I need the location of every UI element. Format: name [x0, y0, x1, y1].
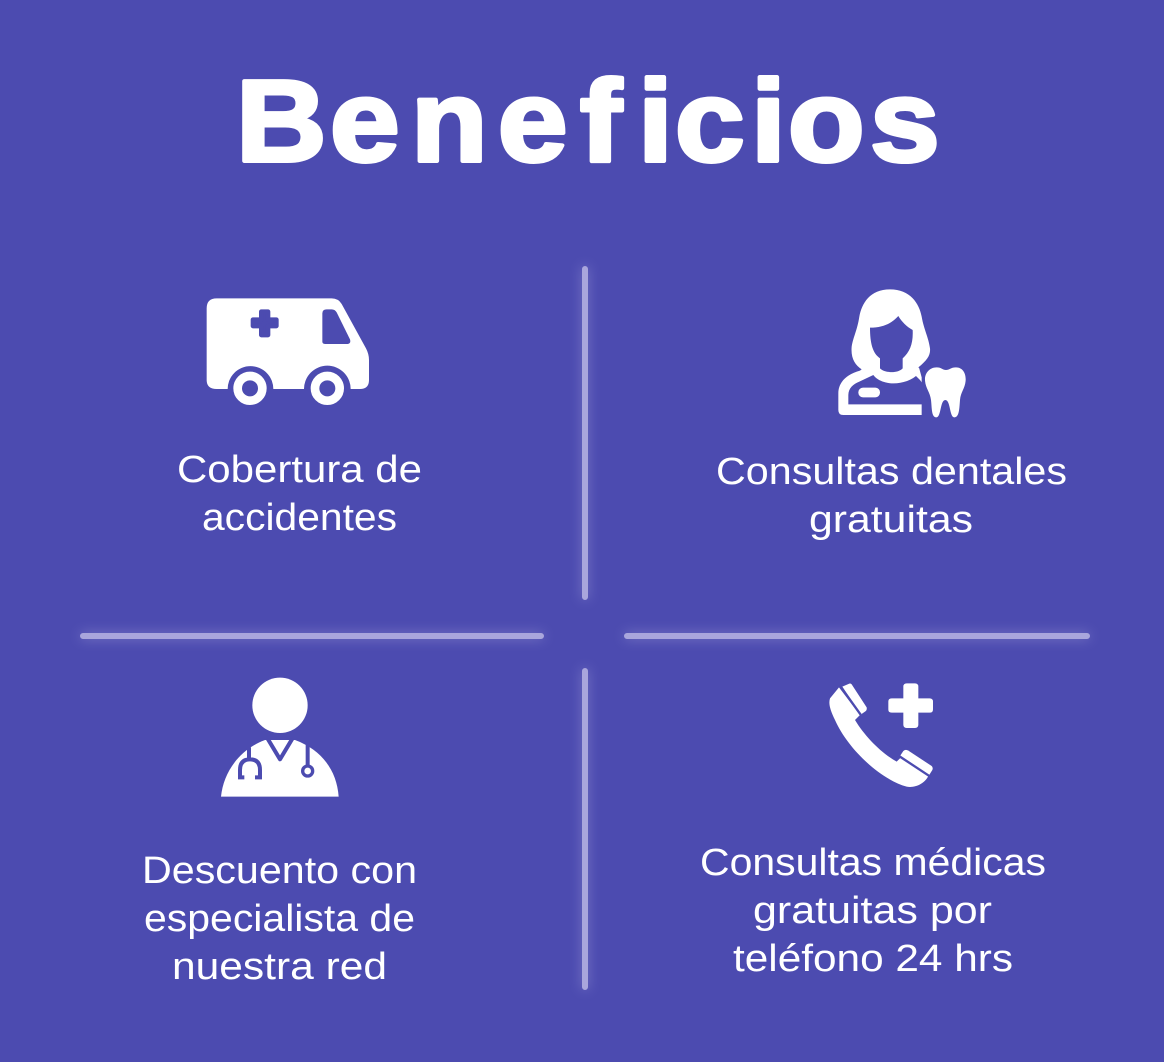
- text: specialist discount: Descuento con: [142, 850, 417, 892]
- text: specialist discount: nuestra red: [172, 946, 387, 988]
- text: phone medical consultations: Consultas médicas: [700, 842, 1046, 884]
- icon: doctor with stethoscope: [221, 678, 339, 797]
- text: dental consultations: gratuitas: [809, 499, 973, 541]
- text: specialist discount: especialista de: [144, 898, 415, 940]
- text: dental consultations: Consultas dentales: [716, 451, 1067, 493]
- icon: ambulance: [207, 298, 369, 401]
- text: phone medical consultations: [700, 842, 1046, 980]
- icon: phone with medical cross: [829, 683, 933, 787]
- panel: dental consultations: [716, 289, 1067, 541]
- text: accident coverage: [177, 449, 422, 539]
- panel: accident coverage: [177, 298, 422, 539]
- title: Beneficios: [236, 56, 940, 186]
- text: phone medical consultations: teléfono 24 hrs: [733, 938, 1013, 980]
- icon: dentist with tooth: [838, 289, 966, 420]
- panel: phone medical consultations: [700, 683, 1046, 980]
- text: specialist discount: [142, 850, 417, 988]
- panel: specialist discount: [142, 678, 417, 988]
- text: accident coverage: Cobertura de: [177, 449, 422, 491]
- text: phone medical consultations: gratuitas por: [753, 890, 992, 932]
- text: accident coverage: accidentes: [202, 497, 397, 539]
- text: dental consultations: [716, 451, 1067, 541]
